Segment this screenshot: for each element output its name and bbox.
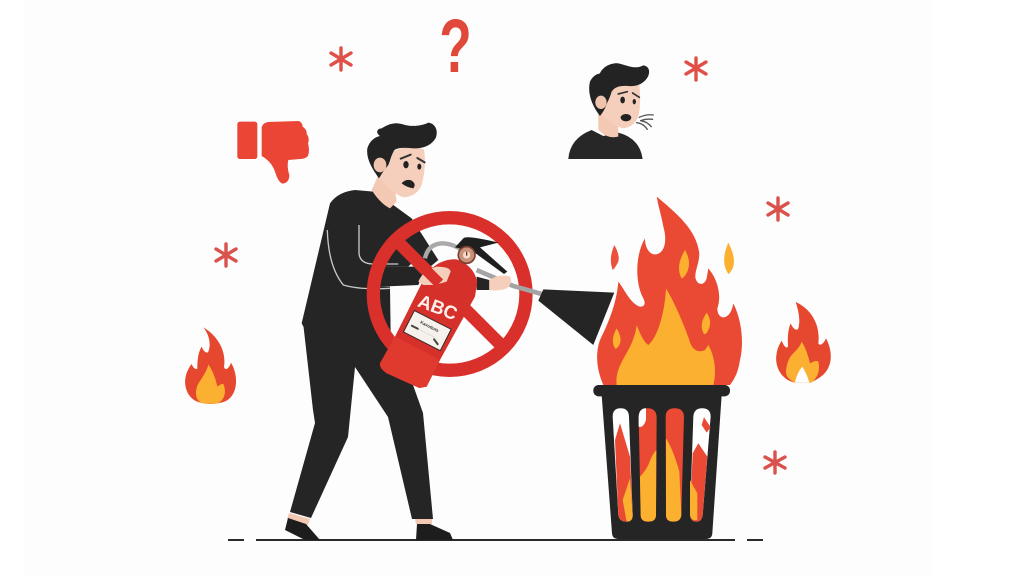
ankles <box>287 513 432 525</box>
asterisk left <box>216 244 236 266</box>
can body <box>602 395 722 539</box>
big flame <box>597 197 742 385</box>
face <box>380 147 425 197</box>
burning trash can <box>593 197 742 539</box>
label ABC: ABC <box>415 290 460 324</box>
face <box>598 83 640 128</box>
icon: small flame right <box>776 302 831 383</box>
left shoe <box>285 518 320 540</box>
extinguisher hose <box>425 243 462 258</box>
extinguisher body <box>380 259 477 388</box>
asterisk top right <box>686 58 706 80</box>
asterisk right upper <box>768 198 788 220</box>
slot 1 <box>613 408 633 522</box>
question mark: ? <box>439 4 472 88</box>
ear <box>595 96 607 109</box>
spark inside upper <box>679 250 689 278</box>
neck <box>598 113 618 137</box>
right shoe <box>416 524 453 540</box>
asterisk right lower <box>765 452 785 473</box>
cough lines <box>637 115 653 129</box>
slot 4 <box>690 408 711 522</box>
shoulders <box>568 130 643 159</box>
mouth <box>621 114 631 121</box>
ember right <box>724 243 734 274</box>
icon: coughing person <box>568 63 653 159</box>
ember left <box>611 245 619 270</box>
mouth <box>402 180 415 188</box>
nozzle cone <box>538 289 614 345</box>
eyes and brows <box>620 97 625 103</box>
no symbol <box>373 218 526 370</box>
eyes and brows <box>403 161 409 168</box>
extinguisher nozzle pipe <box>477 270 542 294</box>
slot 3 <box>666 408 684 522</box>
ear <box>374 158 386 172</box>
sleeve seams <box>327 225 398 289</box>
legs <box>285 322 453 540</box>
left hand <box>418 267 451 285</box>
right leg <box>345 330 433 519</box>
asterisk top left <box>331 48 351 70</box>
torso <box>302 190 438 340</box>
neck <box>372 175 397 208</box>
left forearm <box>380 267 427 287</box>
extinguisher handle levers <box>455 237 507 274</box>
icon: small flame left <box>185 327 236 404</box>
slash over hand <box>423 267 439 283</box>
can rim <box>593 385 730 396</box>
spark inside right <box>702 313 710 334</box>
hair <box>367 123 437 178</box>
left leg <box>290 322 390 518</box>
right sleeve <box>477 277 489 290</box>
right hand <box>489 276 511 291</box>
gauge label: Kavuttuts <box>419 320 440 333</box>
spark inside left <box>613 328 621 349</box>
yellow inner flame <box>616 288 715 385</box>
gauge <box>458 247 475 263</box>
slot 2 <box>639 408 657 522</box>
person with extinguisher <box>285 123 614 540</box>
ground line <box>228 539 763 541</box>
icon: thumbs down <box>237 121 309 184</box>
hair <box>589 63 649 116</box>
